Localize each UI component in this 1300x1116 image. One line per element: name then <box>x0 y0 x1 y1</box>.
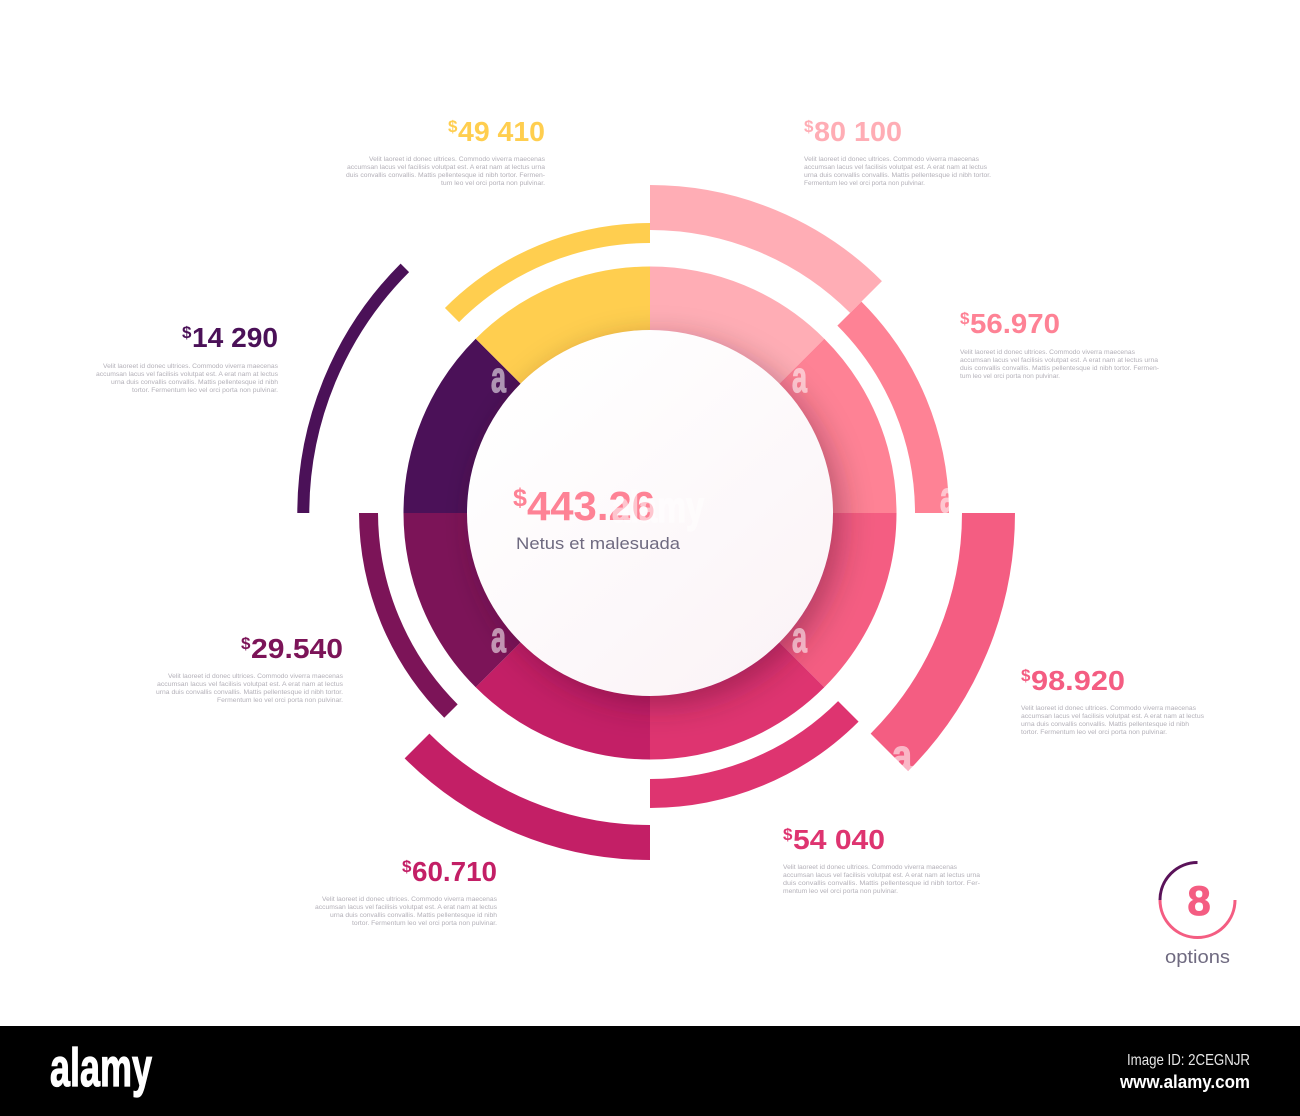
arc: crimson <box>417 746 650 842</box>
watermark glyphs: alamy <box>612 483 704 532</box>
watermark glyphs: a <box>491 613 506 662</box>
ring segment: light pink <box>650 298 802 361</box>
watermark glyphs: a <box>792 353 807 402</box>
callout: 54 040 <box>783 824 980 895</box>
options badge <box>1160 862 1235 967</box>
badge ring: purple arc <box>1160 862 1198 900</box>
callout: 56.970: 56.970 <box>970 308 1060 339</box>
callout: 14 290: $ <box>182 323 192 342</box>
callout: 49 410: $ <box>448 117 458 136</box>
callout: 29.540: accumsan lacus vel facilisis volutpat est. A erat nam at lectus <box>157 681 344 688</box>
callout: 14 290: 14 290 <box>192 322 278 353</box>
callout: 56.970: accumsan lacus vel facilisis volutpat est. A erat nam at lectus urna <box>960 357 1158 364</box>
callout: 98.920: 98.920 <box>1031 665 1125 696</box>
footer bar <box>0 1026 1300 1116</box>
callout: 98.920 <box>1021 665 1205 736</box>
callout: 54 040: mentum leo vel orci porta non pulvinar. <box>783 888 898 895</box>
watermark glyphs: a <box>940 473 955 522</box>
callout: 29.540 <box>156 633 344 704</box>
badge caption: options <box>1165 947 1230 967</box>
callout: 60.710: tortor. Fermentum leo vel orci porta non pulvinar. <box>352 920 497 927</box>
callout: 98.920: $ <box>1021 666 1031 685</box>
callout: 29.540: $ <box>241 634 251 653</box>
callout: 98.920: tortor. Fermentum leo vel orci porta non pulvinar. <box>1021 729 1167 736</box>
watermark glyphs: a <box>792 613 807 662</box>
callout: 60.710: urna duis convallis convallis. Mattis pellentesque id nibh <box>330 912 497 919</box>
central disc <box>467 330 833 696</box>
callout: 49 410: accumsan lacus vel facilisis volutpat est. A erat nam at lectus urna <box>347 164 545 171</box>
callout: 80 100: urna duis convallis convallis. Mattis pellentesque id nibh tortor. <box>804 172 991 179</box>
arc: coral pink <box>849 314 932 513</box>
callout: 49 410: tum leo vel orci porta non pulvinar. <box>441 180 545 187</box>
arc: raspberry <box>650 711 848 794</box>
total value: 443.26 <box>527 483 655 529</box>
callout: 49 410: Velit laoreet id donec ultrices. Commodo viverra maecenas <box>369 156 546 163</box>
callout: 60.710 <box>315 856 498 927</box>
callout: 80 100: 80 100 <box>814 116 902 147</box>
callout: 14 290: Velit laoreet id donec ultrices. Commodo viverra maecenas <box>103 363 279 370</box>
callout: 98.920: urna duis convallis convallis. Mattis pellentesque id nibh <box>1021 721 1189 728</box>
callout: 60.710: $ <box>402 857 412 876</box>
callout: 54 040: accumsan lacus vel facilisis volutpat est. A erat nam at lectus urna <box>783 872 980 879</box>
callout: 29.540: Fermentum leo vel orci porta non pulvinar. <box>217 697 343 704</box>
watermark glyphs <box>491 353 955 780</box>
watermark glyphs: a <box>892 731 912 780</box>
ring segment: raspberry <box>650 665 802 728</box>
central total <box>513 483 681 553</box>
callout: 60.710: Velit laoreet id donec ultrices. Commodo viverra maecenas <box>322 896 498 903</box>
callout: 80 100: Velit laoreet id donec ultrices. Commodo viverra maecenas <box>804 156 980 163</box>
callout: 80 100: Fermentum leo vel orci porta non pulvinar. <box>804 180 925 187</box>
footer url: www.alamy.com <box>1119 1072 1250 1092</box>
total currency sign: $ <box>513 484 527 512</box>
callout: 54 040: 54 040 <box>793 824 885 855</box>
callout: 56.970: tum leo vel orci porta non pulvinar. <box>960 373 1060 380</box>
callout: 98.920: accumsan lacus vel facilisis volutpat est. A erat nam at lectus <box>1021 713 1205 720</box>
ring segment: yellow <box>498 298 650 361</box>
callout: 49 410: duis convallis convallis. Mattis pellentesque id nibh tortor. Fermen- <box>346 172 545 179</box>
ring segment: plum <box>436 513 498 665</box>
arc: rose <box>889 513 988 752</box>
callout: 14 290: tortor. Fermentum leo vel orci porta non pulvinar. <box>132 387 278 394</box>
total caption: Netus et malesuada <box>516 534 681 553</box>
callout: 54 040: duis convallis convallis. Mattis pellentesque id nibh tortor. Fer- <box>783 880 980 887</box>
callout: 80 100: accumsan lacus vel facilisis volutpat est. A erat nam at lectus <box>804 164 988 171</box>
arc: light pink <box>650 208 866 297</box>
ring segment: coral pink <box>802 361 864 513</box>
callout: 49 410: 49 410 <box>458 116 545 147</box>
ring segment: rose <box>802 513 864 665</box>
ring segment: crimson <box>498 665 650 728</box>
footer image id: Image ID: 2CEGNJR <box>1127 1052 1250 1069</box>
arc: dark purple <box>303 268 405 513</box>
callout: 56.970: Velit laoreet id donec ultrices. Commodo viverra maecenas <box>960 349 1136 356</box>
callout: 29.540: Velit laoreet id donec ultrices. Commodo viverra maecenas <box>168 673 344 680</box>
arc: yellow <box>452 233 650 315</box>
callout: 54 040: $ <box>783 825 793 844</box>
footer logo: alamy <box>50 1038 152 1098</box>
callout: 98.920: Velit laoreet id donec ultrices. Commodo viverra maecenas <box>1021 705 1197 712</box>
callout: 54 040: Velit laoreet id donec ultrices. Commodo viverra maecenas <box>783 864 958 871</box>
badge number: 8 <box>1187 877 1211 924</box>
callout: 56.970 <box>960 308 1159 380</box>
callout: 14 290 <box>96 322 279 394</box>
outer arcs <box>303 208 988 842</box>
callout: 56.970: $ <box>960 309 970 328</box>
callout: 29.540: urna duis convallis convallis. Mattis pellentesque id nibh tortor. <box>156 689 343 696</box>
arc: plum <box>368 513 451 711</box>
donut ring with eight segments <box>436 298 864 728</box>
callout: 14 290: accumsan lacus vel facilisis volutpat est. A erat nam at lectus <box>96 371 279 378</box>
callout: 80 100 <box>804 116 991 187</box>
badge ring: lower arc <box>1160 900 1235 938</box>
callout: 60.710: 60.710 <box>412 856 497 887</box>
callout: 80 100: $ <box>804 117 814 136</box>
watermark glyphs: a <box>491 353 506 402</box>
callout: 56.970: duis convallis convallis. Mattis pellentesque id nibh tortor. Fermen- <box>960 365 1159 372</box>
disc shadow on ring <box>474 338 842 706</box>
callout: 29.540: 29.540 <box>251 633 343 664</box>
ring segment: dark purple <box>436 361 498 513</box>
callout: 60.710: accumsan lacus vel facilisis volutpat est. A erat nam at lectus <box>315 904 498 911</box>
callout: 49 410 <box>346 116 546 187</box>
callout: 14 290: urna duis convallis convallis. Mattis pellentesque id nibh <box>111 379 278 386</box>
